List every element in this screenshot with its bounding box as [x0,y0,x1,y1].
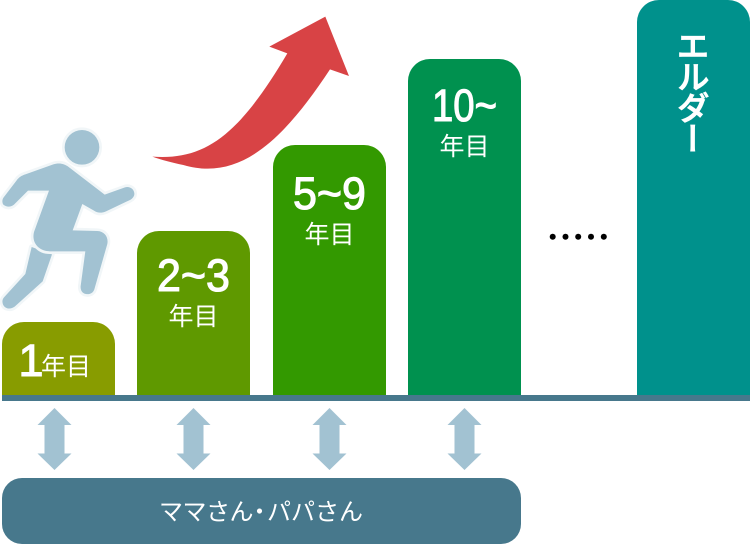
bar: years 2-3: 2~3 [157,250,230,301]
baseline bar [2,395,750,401]
icon: double arrow 4 [448,408,482,470]
bar: years 2-3 [137,231,250,396]
bar: year 1 [2,322,115,396]
icon: double arrow 3 [312,408,346,470]
icon: double arrow 2 [176,408,210,470]
bar: years 10+: 10~ [432,80,497,131]
panel: parents bar [2,478,521,544]
bar: years 2-3: 年目 [168,297,219,333]
icon: running figure [2,130,134,308]
icon: rising red arrow [152,17,349,169]
panel: parents bar: ママさん・パパさん [159,492,363,527]
bar: years 5-9: 年目 [304,215,355,251]
bar: elder [637,0,750,396]
icon: double arrow 1 [38,408,72,470]
bar: years 5-9 [273,145,386,396]
bar: year 1: 1 [18,335,44,386]
ellipsis dots [550,234,607,240]
bar: years 10+ [408,59,521,396]
bar: year 1: 年目 [41,347,91,383]
bar: years 5-9: 5~9 [293,168,366,219]
bar: elder: エルダー [669,29,717,153]
bar: years 10+: 年目 [439,127,490,163]
